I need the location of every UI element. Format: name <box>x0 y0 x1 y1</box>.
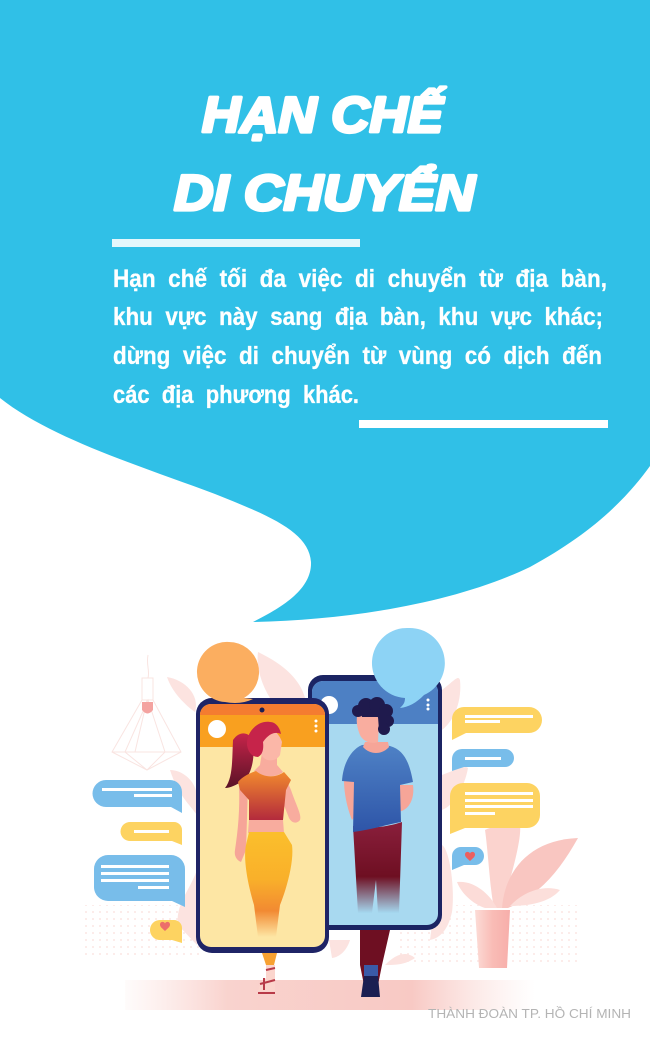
left chat bubbles <box>92 780 185 943</box>
yellow chat bubble <box>120 822 182 845</box>
background: blue wave shape <box>0 0 650 622</box>
icon: hanging lamp <box>112 655 181 770</box>
right chat bubbles <box>450 707 542 870</box>
blue chat bubble 2 <box>94 855 185 907</box>
floor band <box>125 980 535 1010</box>
top divider bar <box>112 239 360 247</box>
body text <box>113 265 607 409</box>
bottom divider bar <box>359 420 608 428</box>
title <box>174 87 476 221</box>
potted plant <box>457 825 578 968</box>
blue chat bubble 1 <box>92 780 182 813</box>
yellow chat bubble 2 <box>450 783 540 834</box>
phone: man (back) <box>308 675 442 930</box>
body text: các địa phương khác. <box>113 381 359 409</box>
phone: woman (front) <box>196 698 329 953</box>
title: HẠN CHẾ <box>202 87 446 143</box>
blue heart bubble <box>452 847 484 870</box>
background leaves <box>167 652 468 965</box>
speech bubble: blue circle <box>372 628 445 708</box>
speech bubble: orange circle <box>197 642 259 703</box>
figure: man <box>342 697 413 997</box>
body text: dừng việc di chuyển từ vùng có dịch đến <box>113 342 602 370</box>
yellow heart bubble <box>150 920 182 943</box>
figure: woman <box>225 722 300 993</box>
blue chat bubble <box>452 749 514 771</box>
dotted background patches <box>82 905 580 965</box>
title: DI CHUYỂN <box>174 165 476 221</box>
illustration <box>82 628 580 1010</box>
yellow chat bubble 1 <box>452 707 542 740</box>
body text: khu vực này sang địa bàn, khu vực khác; <box>113 303 603 331</box>
body text: Hạn chế tối đa việc di chuyển từ địa bàn, <box>113 265 607 293</box>
watermark credit: THÀNH ĐOÀN TP. HỒ CHÍ MINH <box>428 1006 631 1021</box>
